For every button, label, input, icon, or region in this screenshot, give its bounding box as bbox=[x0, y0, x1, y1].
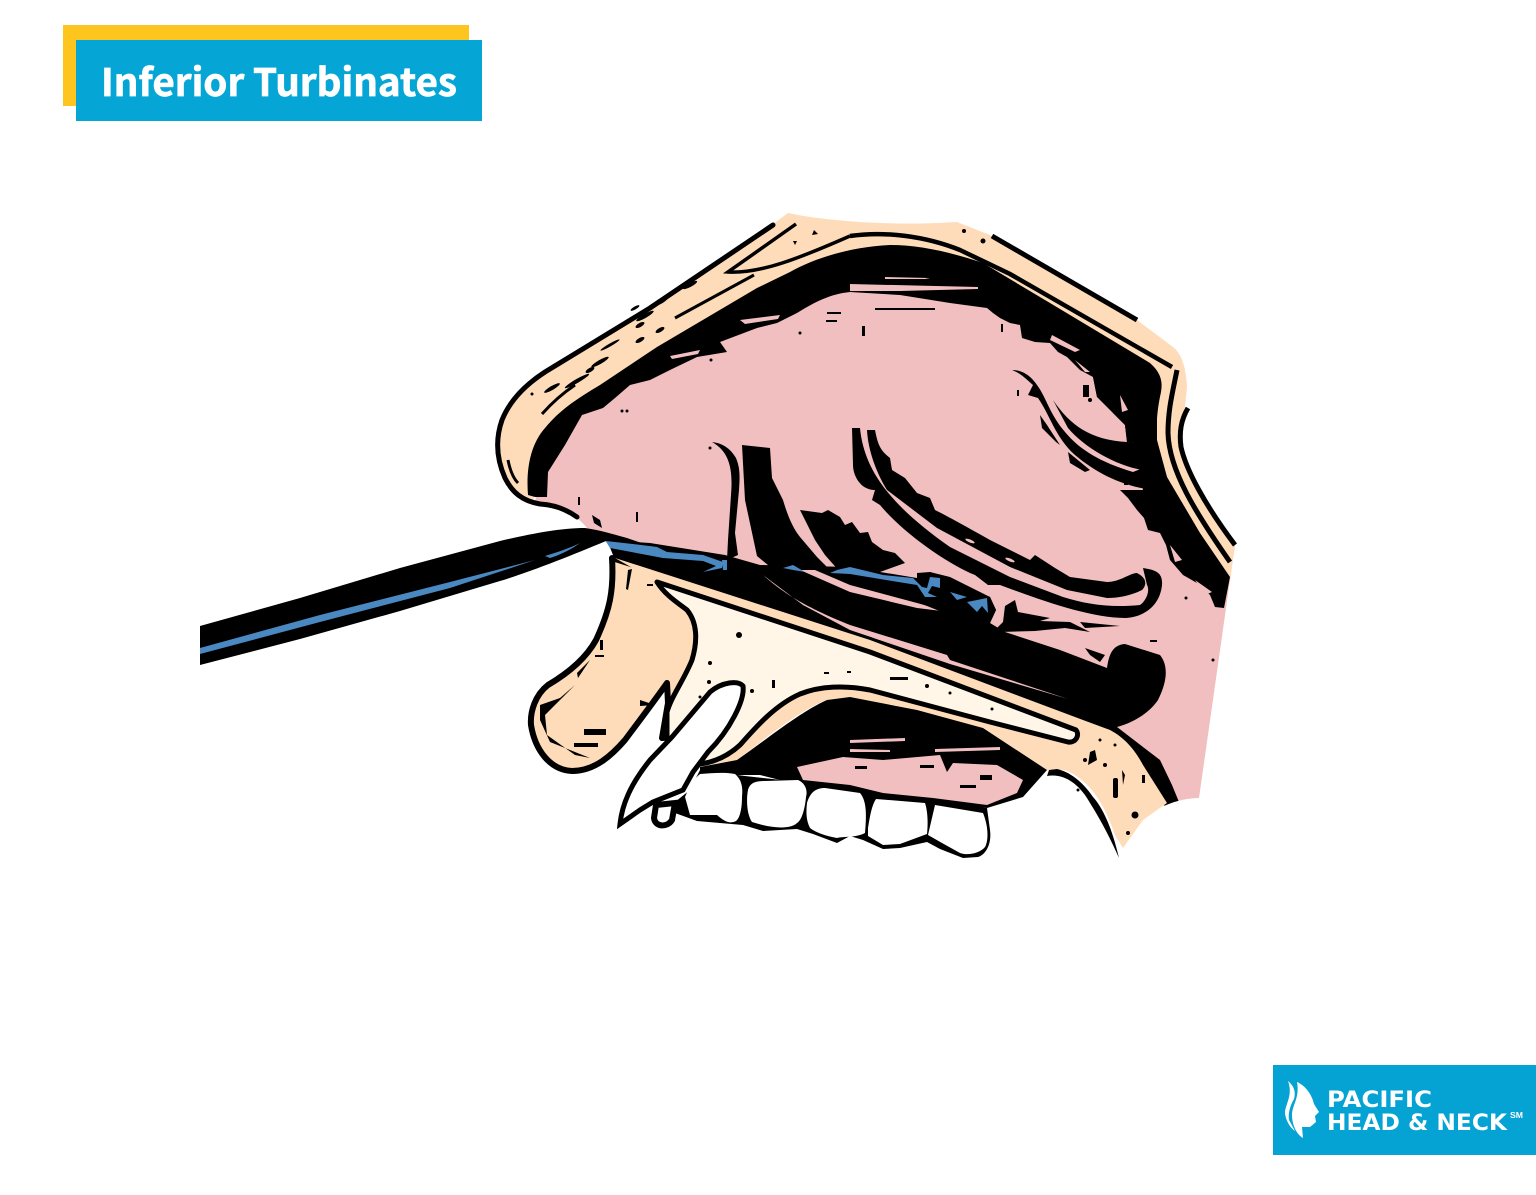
logo: Pacific Head & Neck: HEAD & NECK bbox=[1327, 1111, 1508, 1136]
logo: Pacific Head & Neck: PACIFIC bbox=[1327, 1088, 1432, 1113]
gum specks bbox=[855, 765, 992, 788]
blue mucus line: middle bbox=[783, 565, 988, 613]
black outer contour: bridge and tip of nose bbox=[498, 225, 773, 517]
palate lower black line bbox=[870, 690, 990, 722]
pink streaks in lining bbox=[670, 277, 1212, 595]
central black blade bbox=[742, 445, 835, 575]
tooth 4 bbox=[868, 799, 928, 845]
septum hook and vertical blade bbox=[712, 442, 740, 560]
pink-area specks bbox=[578, 308, 1214, 662]
instrument blue highlight bbox=[200, 543, 580, 654]
cream hard palate bbox=[657, 582, 1078, 764]
premaxilla bone bbox=[531, 558, 870, 771]
oral cavity black mass bbox=[700, 697, 1047, 808]
incisor tooth bbox=[620, 683, 743, 824]
palate peach upper band bbox=[615, 558, 1167, 848]
tooth 1 bbox=[685, 773, 742, 822]
black overlay: back of lining bbox=[1093, 377, 1170, 540]
throat posterior black stroke bbox=[1047, 769, 1119, 858]
peach nasal bone band bbox=[496, 213, 1235, 582]
bone speckles on the nasal bridge bbox=[530, 229, 986, 396]
logo: Pacific Head & Neck: SM bbox=[1510, 1111, 1523, 1120]
jagged attachment patch bbox=[800, 510, 905, 572]
anatomical illustration: sagittal section of the nose bbox=[200, 213, 1300, 900]
logo: Pacific Head & Neck bbox=[1273, 1065, 1536, 1155]
superior turbinate curve bbox=[1012, 370, 1147, 489]
pink sliver between turbinate and floor bbox=[763, 570, 1068, 699]
tooth 3 bbox=[806, 788, 866, 838]
bone specks of the premaxilla bbox=[540, 569, 689, 758]
title banner: Inferior Turbinates bbox=[101, 52, 457, 107]
middle turbinate speckles bbox=[965, 538, 1015, 563]
logo icon: face profile bbox=[1285, 1081, 1319, 1138]
tooth 5 bbox=[928, 805, 987, 854]
black outer contour: back of nasal bone bbox=[992, 236, 1137, 320]
pink gum streaks bbox=[850, 738, 1000, 752]
white scallop mask bottom right bbox=[1121, 798, 1300, 900]
peach-band inner lines bbox=[850, 234, 1172, 367]
black oval pocket with blue streaks bbox=[917, 572, 996, 626]
pink gum bbox=[797, 755, 1023, 805]
title banner bbox=[63, 25, 482, 121]
bone specks of the palate and throat bbox=[698, 632, 1162, 835]
instrument bbox=[200, 528, 650, 665]
black inner lining of nasal roof bbox=[528, 245, 1230, 608]
small tooth root bbox=[654, 803, 675, 825]
teeth row bbox=[675, 770, 990, 858]
pink nasal mucosa bbox=[535, 270, 1235, 802]
nasal floor black mass bbox=[607, 540, 1179, 806]
middle turbinate bbox=[852, 428, 1162, 618]
blue mucus line: anterior bbox=[605, 540, 727, 572]
pink turbinate side pocket and specks bbox=[995, 600, 1120, 662]
tooth 2 bbox=[747, 780, 807, 827]
